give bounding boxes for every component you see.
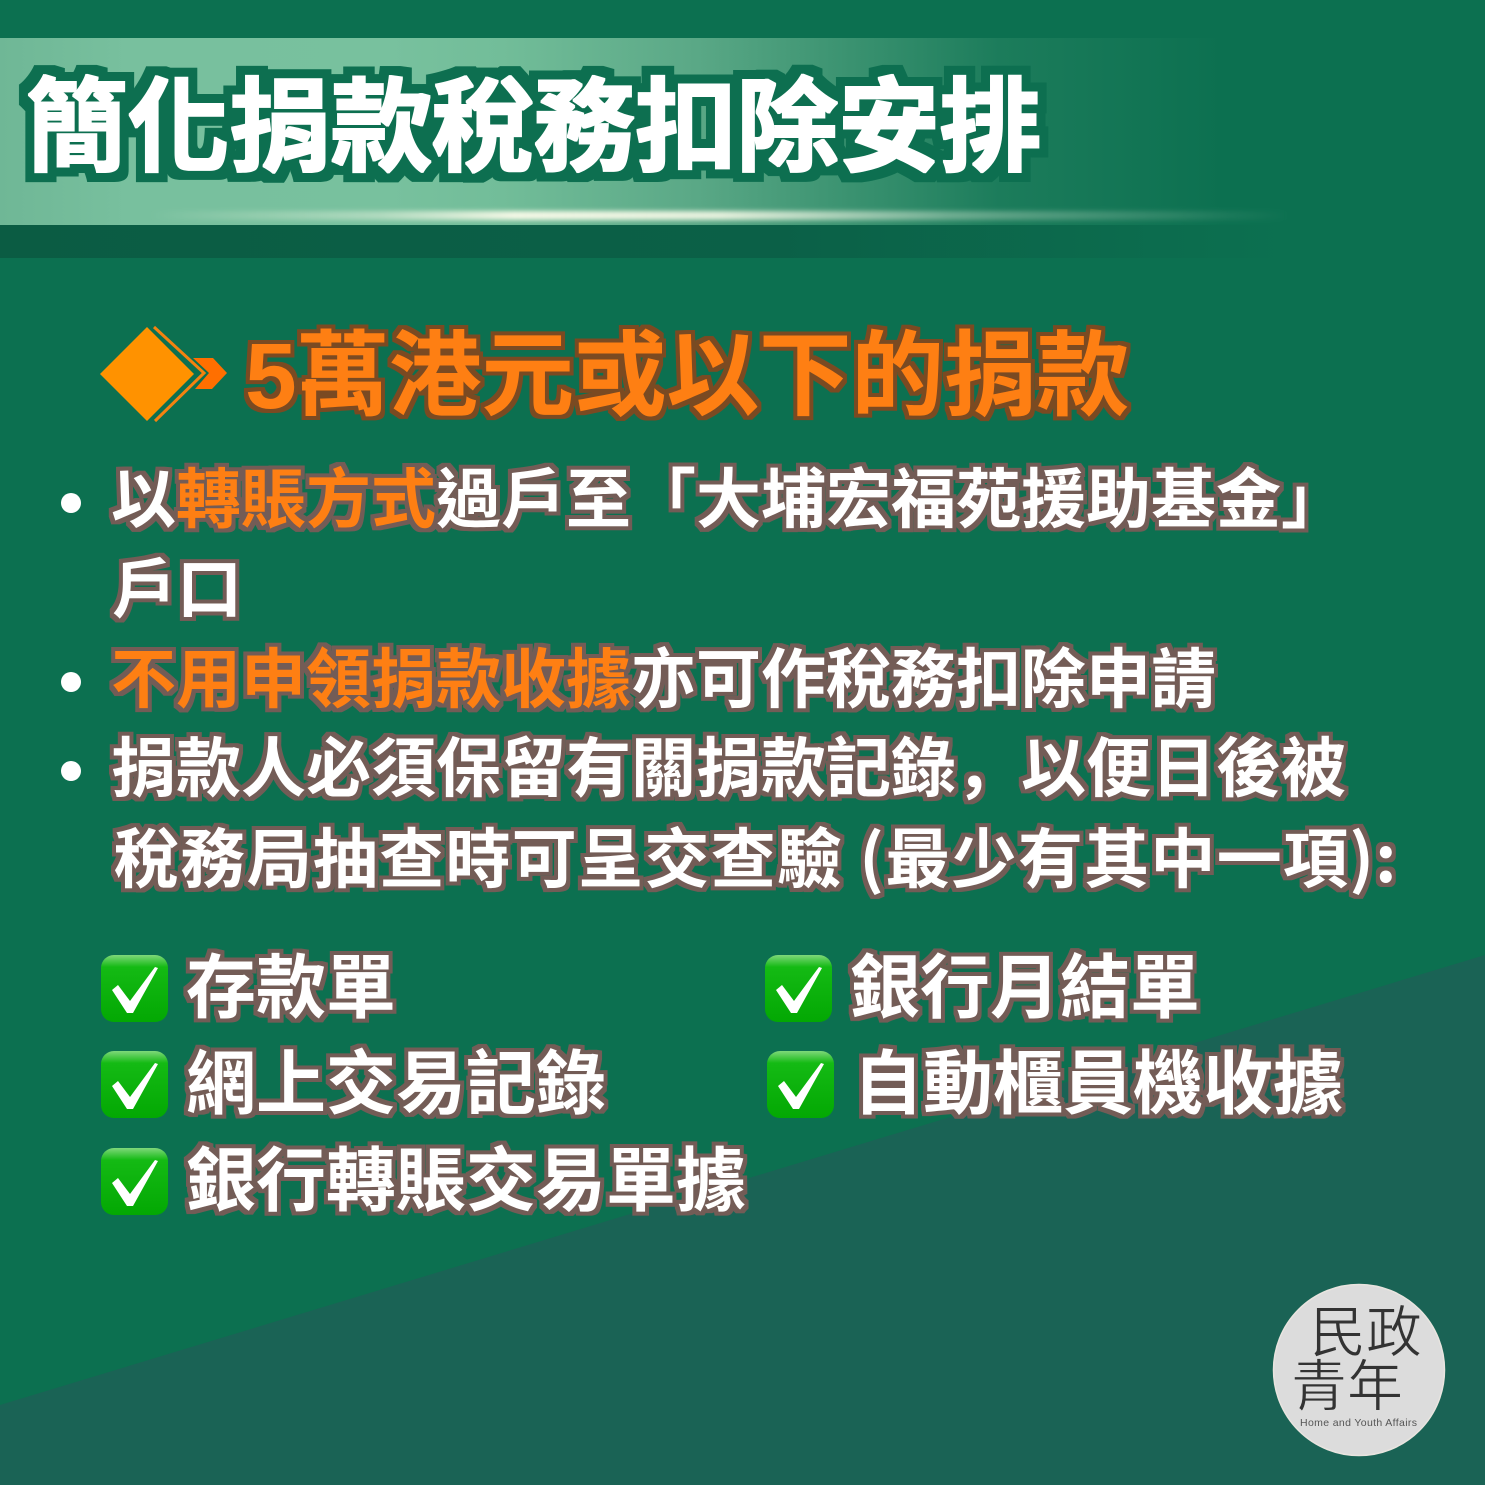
item: 銀行月結單: 銀行月結單 [850,949,1200,1027]
bullet 3: 捐款人必須保留有關捐款記錄，以便日後被 [111,716,1346,810]
bullet 1: 戶口 [112,553,242,626]
bullet 1 [61,463,1346,626]
item: 網上交易記錄: 網上交易記錄 [186,1045,606,1123]
background lower diagonal panel [0,955,1485,1485]
item: 銀行轉賬交易單據: 銀行轉賬交易單據 [186,1142,746,1220]
section heading: 5萬港元或以下的捐款 [245,324,1129,428]
logo: Home and Youth Affairs: 青年 [1291,1342,1403,1423]
bullet 1: 以轉賬方式過戶至「大埔宏福苑援助基金」 [111,463,1346,536]
title banner [0,38,1290,258]
logo: Home and Youth Affairs: Home and Youth Affairs [1300,1417,1417,1429]
bullet 3: 稅務局抽查時可呈交查驗 (最少有其中一項): [114,807,1398,901]
bullet 3 [61,716,1398,901]
bullet list [61,463,1398,901]
item: 自動櫃員機收據: 自動櫃員機收據 [853,1045,1343,1123]
bullet 2: 不用申領捐款收據亦可作稅務扣除申請 [111,643,1216,716]
checklist [101,949,1343,1220]
title: 簡化捐款稅務扣除安排 [26,46,1041,193]
icon: orange diamond arrow [100,327,227,421]
logo: Home and Youth Affairs: 民政 [1310,1288,1422,1369]
logo: Home and Youth Affairs [1274,1284,1444,1456]
item: 存款單: 存款單 [186,949,396,1027]
